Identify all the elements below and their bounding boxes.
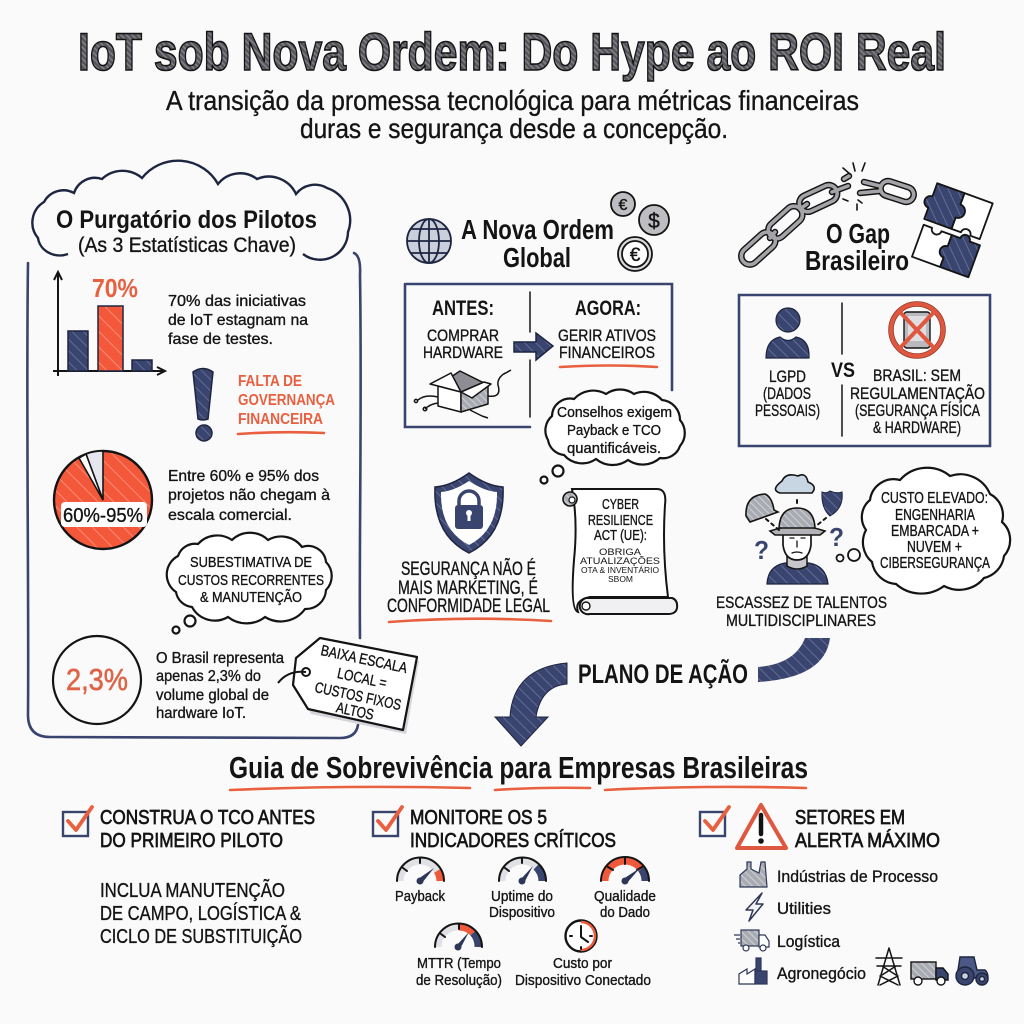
antes label: ANTES: [432,297,494,320]
heading: CONSTRUA O TCO ANTES [100,807,315,829]
heading [461,214,614,273]
pie chart: 60%-95% [63,505,143,527]
icon: coins: € [630,245,641,266]
price tag: BAIXA ESCALA [319,642,409,677]
gauge: mttr: MTTR (Tempo [417,956,501,972]
thought cloud: custos recorrentes: SUBESTIMATIVA DE [190,554,312,571]
scroll: cyber resilience act: ATUALIZAÇÕES [580,556,660,567]
stat text 60-95% [168,468,330,524]
clock: custo por dispositivo: Custo por [553,956,612,972]
stat text Brasil: hardware IoT. [156,705,246,722]
icon: exclamation [193,368,213,441]
price tag: CUSTOS FIXOS [313,679,403,714]
icon: puzzled engineer [746,475,860,584]
body: DE CAMPO, LOGÍSTICA & [100,902,302,925]
antes label [423,297,503,362]
heading [410,807,616,852]
stat circle 2,3%: 2,3% [66,662,128,697]
thought cloud: custo elevado: ENGENHARIA [895,507,976,524]
stat text Brasil: O Brasil representa [156,650,284,667]
icon: truck [911,962,948,985]
vs: VS [831,359,855,382]
brasil label: REGULAMENTAÇÃO [850,383,985,403]
icon: checkbox [63,807,92,836]
brasil label [850,367,985,437]
icon: person [766,308,809,358]
thought cloud: custos recorrentes [167,533,332,634]
brasil label: BRASIL: SEM [873,367,961,385]
heading: DO PRIMEIRO PILOTO [100,830,283,852]
price tag [278,638,419,734]
bar chart: 70% [92,273,138,303]
stat text 70%: de IoT estagnam na [168,312,308,329]
callout: falta de governança: FALTA DE [238,373,302,390]
stat circle 2,3% [53,636,141,724]
gauge: mttr: de Resolução) [416,973,502,989]
bar chart [53,272,165,376]
icon: shield with padlock [435,473,503,553]
text: segurança conformidade: SEGURANÇA NÃO É [401,558,536,580]
stat text Brasil: volume global de [156,687,269,704]
icon: open box with cables [414,370,511,418]
icon: warning triangle [737,805,786,848]
thought cloud: conselhos: Conselhos exigem [557,404,672,421]
icon: delivery truck [734,930,769,951]
scroll: cyber resilience act: OBRIGA [599,547,642,558]
lgpd label [755,368,820,420]
icon: broken chain [738,163,916,268]
icon: coins [611,192,669,271]
icon: puzzle pieces [912,181,993,277]
sector: agronegócio: Agronegócio [777,965,866,983]
clock: custo por dispositivo [515,920,651,989]
thought cloud: custo elevado [862,468,1010,594]
gauge: qualidade [594,857,656,921]
heading: Global [503,242,571,273]
stat text 60-95%: Entre 60% e 95% dos [168,468,319,485]
heading: Brasileiro [805,245,909,276]
section heading: guia de sobrevivência: Guia de Sobrevivência para Empresas Brasileiras [229,750,808,785]
thought cloud: custos recorrentes: & MANUTENÇÃO [200,589,302,606]
callout: falta de governança: FINANCEIRA [238,411,323,428]
heading: A Nova Ordem [461,214,614,245]
subtitle [166,85,859,144]
icon: factory 2 [739,958,767,984]
pie chart [54,451,152,549]
antes label: HARDWARE [423,343,503,362]
heading [805,218,909,276]
stat text 70% [168,293,308,348]
stat text Brasil: apenas 2,3% do [156,668,261,685]
gauge: payback: Payback [395,889,446,905]
lgpd label: LGPD [769,368,806,386]
action plan banner [495,638,830,746]
body: CICLO DE SUBSTITUIÇÃO [100,924,302,948]
text: segurança conformidade: CONFORMIDADE LEGAL [387,596,550,617]
callout: falta de governança: GOVERNANÇA [238,392,335,409]
lgpd label: PESSOAIS) [755,402,820,420]
gauge: uptime: Dispositivo [489,905,555,921]
plano de ação label: PLANO DE AÇÃO [578,658,748,689]
icon: checkbox [700,807,729,836]
callout: falta de governança [238,373,335,434]
agora label: AGORA: [575,297,641,320]
scroll: cyber resilience act: OTA & INVENTÁRIO [581,566,659,575]
scroll: cyber resilience act: RESILIENCE [588,513,653,529]
heading: MONITORE OS 5 [410,807,547,829]
subtitle: A transição da promessa tecnológica para métricas financeiras [166,85,859,116]
text: escassez de talentos: MULTIDISCIPLINARES [726,611,876,630]
stat text 60-95%: projetos não chegam à [168,487,330,504]
heading: O Gap [826,218,890,249]
text: escassez de talentos: ESCASSEZ DE TALENTOS [716,593,887,612]
icon: coins: $ [648,210,660,233]
panel: O Gap Brasileiro [716,163,1010,630]
icon: prohibited device [891,304,943,356]
stat text 70%: fase de testes. [168,331,273,348]
sector: utilities: Utilities [777,900,831,918]
thought cloud: conselhos: Payback e TCO [567,422,661,439]
heading [795,807,940,852]
thought cloud: custos recorrentes: CUSTOS RECORRENTES [178,572,324,589]
stat text 70%: 70% das iniciativas [168,293,306,310]
gauge: uptime: Uptime do [491,889,553,905]
icon: puzzled engineer: ? [754,535,769,565]
thought cloud: conselhos [540,389,685,484]
thought cloud: conselhos: quantificáveis. [567,440,661,457]
agora label: GERIR ATIVOS [558,326,656,345]
heading cloud [32,161,350,260]
panel: monitore os 5 indicadores [373,807,656,989]
body [100,878,302,948]
icon: tractor [956,957,988,985]
heading: INDICADORES CRÍTICOS [410,829,616,852]
heading: ALERTA MÁXIMO [795,829,940,852]
icon: lightning bolt [746,893,763,921]
panel: construa o TCO [63,807,315,948]
thought cloud: custo elevado: CUSTO ELEVADO: [881,490,988,507]
antes label: COMPRAR [427,326,499,345]
clock: custo por dispositivo: Dispositivo Conectado [515,973,651,989]
icon: factory [740,862,767,887]
price tag: ALTOS [335,699,375,724]
agora label: FINANCEIROS [559,343,655,362]
gauge: uptime [489,858,555,921]
icon: coins: € [619,197,628,214]
panel frame [27,253,361,738]
brasil label: & HARDWARE) [873,419,961,437]
price tag: LOCAL = [336,665,388,692]
arrow: curved left [495,663,567,746]
sector: indústrias: Indústrias de Processo [777,868,938,886]
panel: setores em alerta [700,805,988,985]
stat text 60-95%: escala comercial. [168,507,292,524]
scroll: cyber resilience act: CYBER [602,497,639,513]
agora label [558,297,657,367]
brasil label: (SEGURANÇA FÍSICA [855,401,980,420]
heading [100,807,315,852]
icon: puzzled engineer: ? [829,522,844,552]
lgpd label: (DADOS [763,385,811,403]
thought cloud: custo elevado: NUVEM + [907,539,962,556]
body: INCLUA MANUTENÇÃO [100,878,285,902]
gauge: qualidade: do Dado [600,905,650,921]
scroll: cyber resilience act [563,489,677,614]
gauge: qualidade: Qualidade [594,889,656,905]
icon: checkbox [373,807,402,836]
text: segurança conformidade [387,558,551,622]
arrow: incoming stub [758,638,830,682]
icon: globe [407,219,451,263]
arrow [514,333,553,360]
antes agora box [405,284,672,427]
scroll: cyber resilience act: ACT (UE): [594,528,647,544]
gauge: mttr [416,923,502,989]
thought cloud: custo elevado: EMBARCADA + [891,523,979,540]
subtitle: duras e segurança desde a concepção. [300,113,728,144]
heading: SETORES EM [795,807,905,829]
heading text: (As 3 Estatísticas Chave) [78,234,296,257]
text: escassez de talentos [716,593,887,630]
heading text [56,206,317,257]
text: segurança conformidade: MAIS MARKETING, É [398,578,538,599]
sector: logística: Logística [777,933,841,951]
heading text: O Purgatório dos Pilotos [56,206,317,234]
panel: O Purgatório dos Pilotos [27,161,419,738]
thought cloud: custo elevado: CIBERSEGURANÇA [880,555,990,572]
scroll: cyber resilience act: SBOM [608,575,633,584]
comparison box [739,295,990,446]
stat text Brasil [156,650,284,722]
panel: A Nova Ordem Global [387,192,685,622]
gauge: payback [395,858,446,905]
icon: transmission tower [876,948,902,985]
